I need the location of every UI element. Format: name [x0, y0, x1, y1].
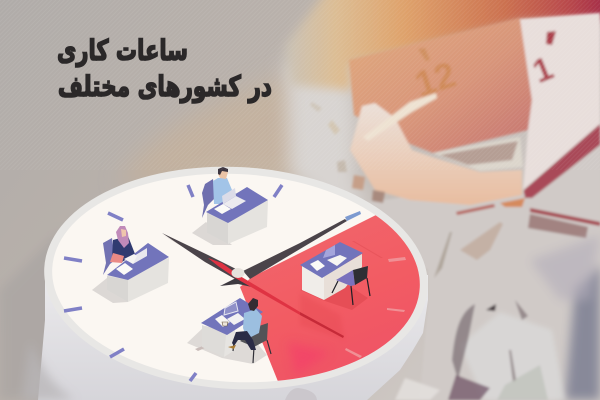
chair seat [336, 270, 355, 286]
laptop screen [349, 18, 532, 153]
red wedge ticks [388, 257, 406, 262]
chair legs [332, 278, 370, 305]
pen [363, 93, 437, 141]
desk top [107, 243, 169, 280]
hand [350, 103, 522, 205]
desk body [202, 325, 226, 357]
desk top [201, 298, 263, 335]
papers [215, 315, 230, 327]
crimson clock hand band [524, 124, 600, 198]
paper [116, 263, 133, 275]
person skirt [110, 253, 124, 263]
head [248, 298, 258, 311]
desk top [300, 242, 363, 278]
clock body side wall [38, 270, 428, 400]
laptop [133, 248, 147, 264]
blurred clock ticks [456, 204, 495, 215]
numeral 1 on the paper clock: 1 [527, 49, 558, 90]
clock face [47, 165, 425, 391]
hand counterweight [220, 278, 257, 288]
desk left: woman in hijab [92, 226, 169, 303]
laptop [224, 302, 238, 315]
clock rim [38, 157, 434, 399]
tick above the 12 [418, 48, 430, 61]
title line 1: ساعات کاری [57, 34, 188, 67]
hour hand to upper left [162, 233, 242, 279]
laptop [223, 196, 246, 209]
desk end side [324, 254, 362, 300]
clock hands [162, 211, 361, 338]
red second hand [208, 258, 300, 315]
person torso [112, 236, 135, 262]
chair back [353, 266, 368, 285]
red time wedge [240, 215, 420, 381]
person torso [243, 309, 262, 339]
shoes [228, 345, 236, 349]
dark sleeve folds [452, 304, 475, 380]
soft overlay hatch [0, 0, 600, 170]
shadow [300, 280, 368, 310]
hub [232, 268, 244, 278]
shadow [187, 326, 267, 364]
red hand continuation [300, 312, 344, 338]
desk top: man at laptop [192, 167, 268, 245]
laptop screen [323, 245, 335, 258]
person legs [232, 331, 256, 350]
background photo: laptop and hand behind the clock [285, 0, 600, 400]
clock [22, 157, 450, 400]
hair [218, 167, 228, 175]
title line 2: در کشورهای مختلف [58, 70, 272, 104]
chair [202, 179, 215, 218]
coffee cup [222, 322, 228, 326]
face [121, 229, 126, 237]
person torso [213, 178, 240, 204]
orange band [285, 0, 600, 90]
hand shadow [163, 235, 238, 279]
papers [310, 260, 325, 271]
desk body [207, 200, 268, 244]
desk bottom: man with dark hair [187, 298, 271, 364]
desk top [206, 187, 268, 223]
sleeve shadow at lower right [565, 265, 600, 400]
chair [103, 238, 115, 275]
numeral 12 on the laptop screen: 12 [410, 53, 461, 105]
side wall reflections [22, 340, 75, 400]
minute hand to upper right [243, 219, 347, 279]
white paper clock segment [520, 13, 600, 190]
person head [218, 168, 228, 179]
laptop keyboard [327, 255, 347, 266]
shadow [92, 278, 128, 303]
tan clock ticks [310, 102, 322, 112]
shadow [192, 222, 232, 245]
hour tick marks [64, 185, 282, 381]
keyboard [433, 137, 523, 171]
chair [240, 323, 268, 347]
desk body [107, 258, 169, 302]
hijab [116, 226, 129, 248]
left light photo area [285, 55, 372, 215]
paper [214, 204, 231, 214]
light cloth folds [460, 312, 565, 400]
forearm sleeve and lower photo [345, 124, 600, 400]
desk front side [302, 265, 324, 300]
desk right: empty desk on red wedge [300, 242, 370, 310]
title [57, 34, 272, 104]
hand tip tick [345, 211, 361, 221]
tick on the paper clock [546, 31, 556, 45]
